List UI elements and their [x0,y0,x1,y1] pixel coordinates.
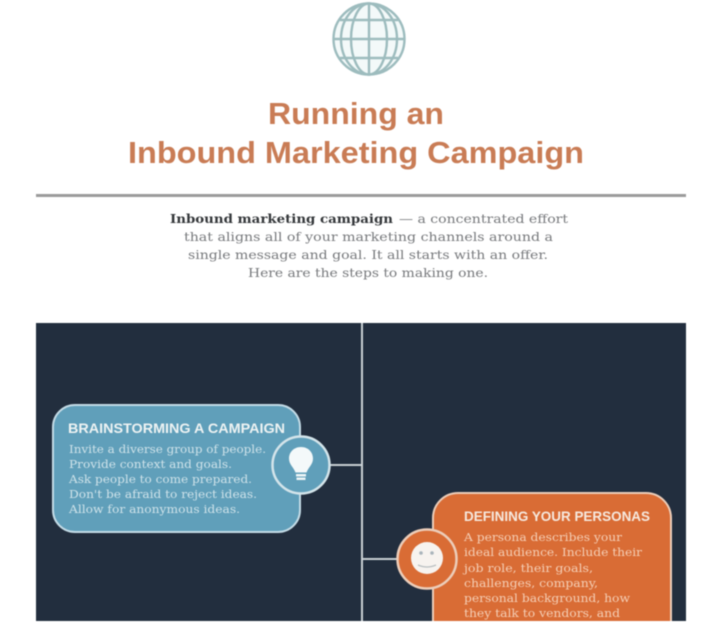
intro text: that aligns all of your marketing channels around a [184,229,554,244]
icon: globe [334,4,404,74]
intro text [170,211,568,280]
icon: smiley face [398,530,456,588]
text: brainstorming tips: Don't be afraid to reject ideas. [69,487,257,501]
text: brainstorming tips: Ask people to come prepared. [68,472,252,486]
text: persona description [462,530,643,620]
text: persona description: they talk to vendors, and [464,606,621,620]
text: persona description: job role, their goals, [462,561,593,575]
heading: personas: DEFINING YOUR PERSONAS [464,508,650,524]
intro text: — a concentrated effort [399,211,568,226]
intro text: single message and goal. It all starts with an offer. [188,247,548,262]
connector: personas to timeline [362,558,398,560]
icon: light bulb [272,436,330,494]
intro text: Here are the steps to making one. [248,265,488,280]
text: persona description: ideal audience. Include their [464,545,643,559]
connector: brainstorming to timeline [328,464,362,466]
divider rule [36,194,686,197]
panel: brainstorming a campaign [53,405,330,532]
text: brainstorming tips [68,442,266,516]
text: persona description: challenges, company, [464,576,598,590]
heading: brainstorming: BRAINSTORMING A CAMPAIGN [68,420,285,436]
text: persona description: A persona describes your [463,530,623,544]
title [128,96,584,170]
title: Running an [268,96,444,131]
panel: defining your personas [398,493,671,621]
text: brainstorming tips: Allow for anonymous ideas. [68,502,240,516]
title: Inbound Marketing Campaign [128,135,584,170]
text: brainstorming tips: Provide context and goals. [69,457,232,471]
text: brainstorming tips: Invite a diverse group of people. [69,442,266,456]
intro text: Inbound marketing campaign [170,211,393,226]
panel: dark timeline background [36,323,686,621]
timeline vertical line [361,323,363,621]
text: persona description: personal background, how [464,591,630,605]
